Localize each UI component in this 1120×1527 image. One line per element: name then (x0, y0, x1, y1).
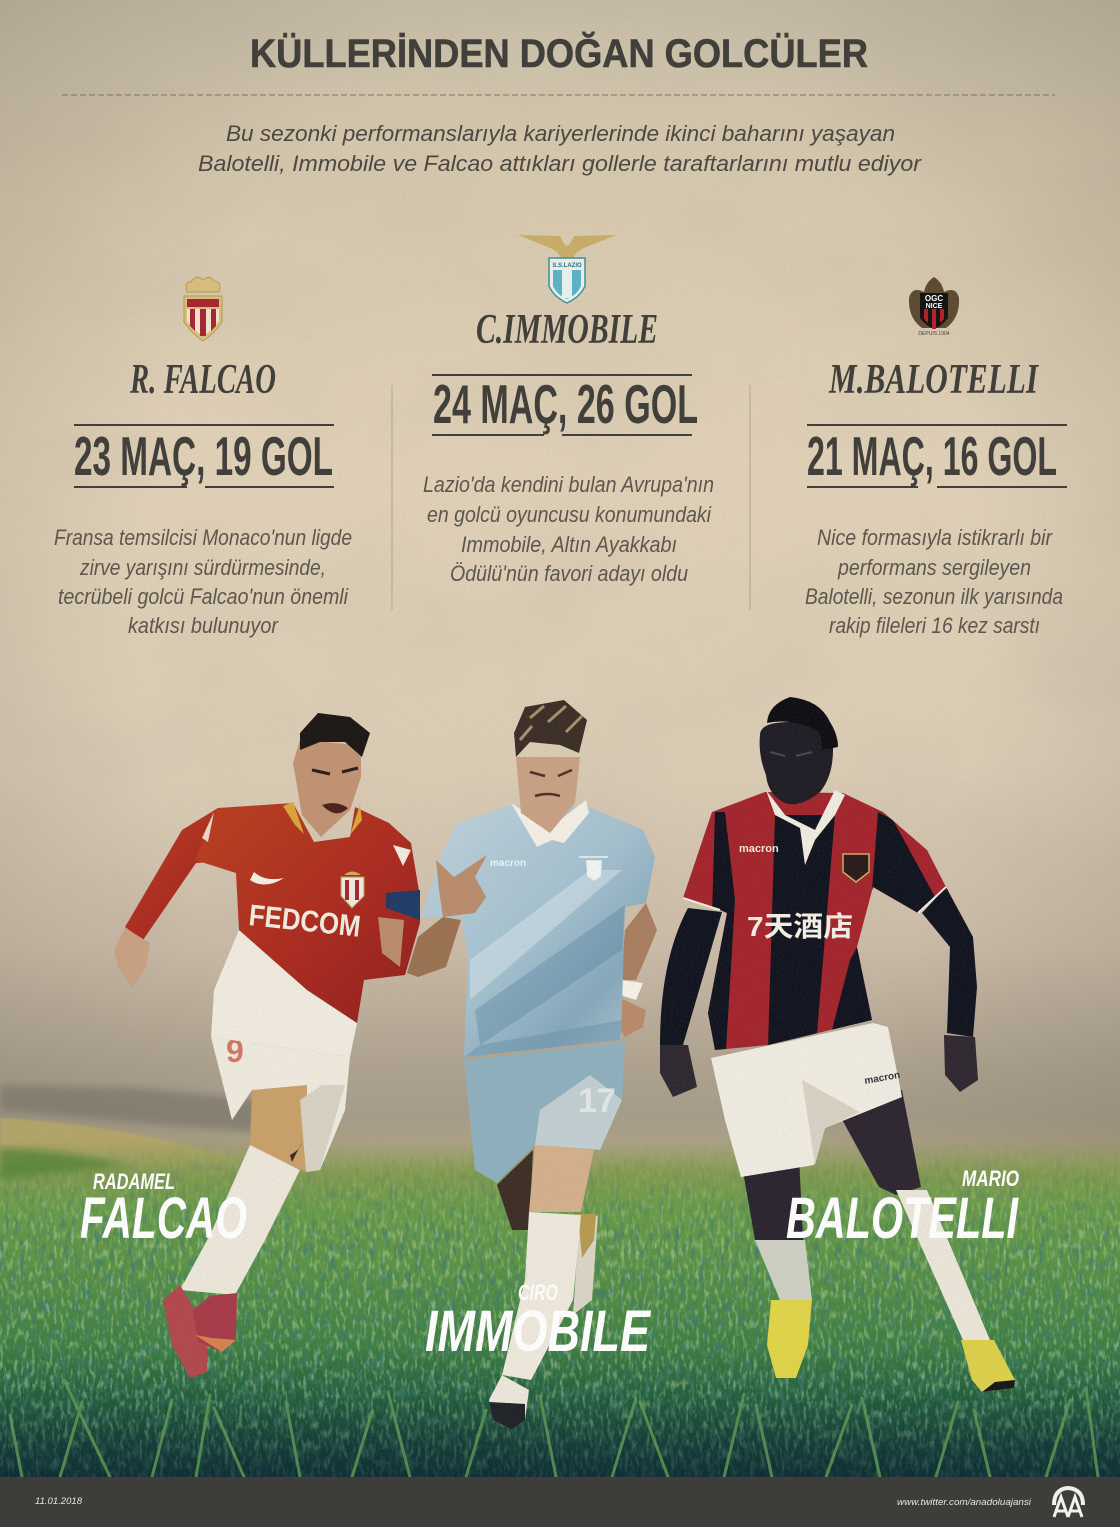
column dividers (392, 385, 750, 610)
jersey (421, 805, 655, 1057)
player name overlay: Mario Balotelli (786, 1166, 1019, 1251)
shorts (211, 1033, 350, 1172)
panel: Falcao stats (54, 277, 352, 638)
description text: Balotelli, sezonun ilk yarısında (805, 584, 1063, 609)
shorts: 9 (226, 1033, 244, 1069)
right arm (621, 903, 657, 980)
description text: Nice formasıyla istikrarlı bir (817, 525, 1053, 550)
player illustration: Falcao (114, 713, 420, 1378)
stat: matches and goals: 24 MAÇ, 26 GOL (433, 373, 698, 435)
boots (163, 1285, 237, 1378)
player illustration: Balotelli: 7天酒店 (747, 911, 853, 942)
icon: OGC Nice crest (909, 277, 959, 337)
shorts: 17 (578, 1082, 616, 1120)
subtitle: Balotelli, Immobile ve Falcao attıkları gollerle taraftarlarını mutlu ediyor (198, 151, 923, 176)
collar trim (283, 802, 362, 835)
player name overlay: Ciro Immobile: CIRO (518, 1280, 558, 1305)
knee and lower leg (180, 1085, 322, 1295)
neck and face (516, 757, 580, 833)
shorts: macron (864, 1070, 901, 1087)
description text: Fransa temsilcisi Monaco'nun ligde (54, 525, 352, 550)
player name: R. FALCAO (129, 357, 276, 403)
subtitle: Bu sezonki performanslarıyla kariyerlerinde ikinci baharını yaşayan (226, 121, 895, 146)
player name overlay: Mario Balotelli: MARIO (962, 1166, 1019, 1191)
description text (423, 472, 714, 586)
player name overlay: Ciro Immobile (425, 1280, 652, 1364)
hair (514, 700, 587, 757)
hair (767, 697, 838, 750)
icon: OGC Nice crest: NICE (926, 303, 943, 310)
player name overlay: Radamel Falcao (80, 1169, 247, 1251)
head (760, 722, 833, 804)
icon: Anadolu Agency logo (1054, 1488, 1083, 1517)
description text (805, 525, 1063, 638)
description text: zirve yarışını sürdürmesinde, (79, 555, 326, 580)
stat: matches and goals: 23 MAÇ, 19 GOL (74, 425, 333, 487)
icon: SS Lazio crest (518, 235, 617, 303)
description text: Lazio'da kendini bulan Avrupa'nın (423, 472, 714, 497)
player illustration: Immobile: macron (490, 858, 526, 869)
sock (502, 1212, 581, 1380)
description text: katkısı bulunuyor (128, 613, 280, 638)
boot (489, 1375, 529, 1430)
player name overlay: Radamel Falcao: FALCAO (80, 1186, 247, 1251)
striped jersey (683, 792, 946, 1050)
jersey (195, 803, 420, 1023)
shorts (711, 1023, 902, 1177)
title: KÜLLERİNDEN DOĞAN GOLCÜLER (250, 30, 868, 76)
player name overlay: Mario Balotelli: BALOTELLI (786, 1186, 1019, 1251)
description text: performans sergileyen (837, 555, 1031, 580)
subtitle (198, 121, 923, 176)
right leg (833, 1090, 1015, 1392)
trailing hand (114, 928, 150, 988)
sponsor and crest (250, 872, 284, 885)
forearm and pointing hand (407, 917, 461, 977)
panel: Immobile stats (423, 235, 714, 586)
player illustration: Falcao: FEDCOM (247, 899, 362, 944)
player illustration: Balotelli (660, 697, 1015, 1392)
description text: en golcü oyuncusu konumundaki (427, 502, 712, 527)
description text: tecrübeli golcü Falcao'nun önemli (58, 584, 349, 609)
description text: Immobile, Altın Ayakkabı (461, 532, 677, 557)
icon: OGC Nice crest: OGC (925, 294, 943, 303)
sponsor marks: macron (739, 843, 779, 855)
face (293, 740, 361, 837)
social link: www.twitter.com/anadoluajansi (897, 1497, 1032, 1508)
sleeve (125, 808, 240, 940)
rear leg (497, 1150, 533, 1230)
arms and hands (660, 908, 722, 1045)
description text: rakip fileleri 16 kez sarstı (829, 613, 1040, 638)
description text (54, 525, 352, 638)
icon: OGC Nice crest: DEPUIS 1904 (918, 331, 950, 337)
date: 11.01.2018 (35, 1496, 83, 1507)
player illustration: Immobile (407, 700, 657, 1430)
icon: SS Lazio crest: S.S.LAZIO (552, 263, 582, 269)
player name: C.IMMOBILE (476, 307, 658, 353)
footer bar (0, 1477, 1120, 1527)
player name overlay: Radamel Falcao: RADAMEL (93, 1169, 175, 1194)
player name overlay: Ciro Immobile: IMMOBILE (425, 1299, 652, 1364)
collar (766, 790, 845, 865)
collar (511, 800, 589, 847)
lower jersey white section (211, 930, 357, 1057)
description text: Ödülü'nün favori adayı oldu (450, 561, 688, 586)
hair (300, 713, 370, 757)
left leg (741, 1155, 812, 1378)
sleeve trim (683, 887, 946, 913)
panel: Balotelli stats (805, 277, 1067, 638)
icon: AS Monaco crest (184, 277, 222, 341)
front thigh (529, 1145, 594, 1212)
player name: M.BALOTELLI (828, 357, 1039, 403)
shorts (464, 1042, 625, 1183)
